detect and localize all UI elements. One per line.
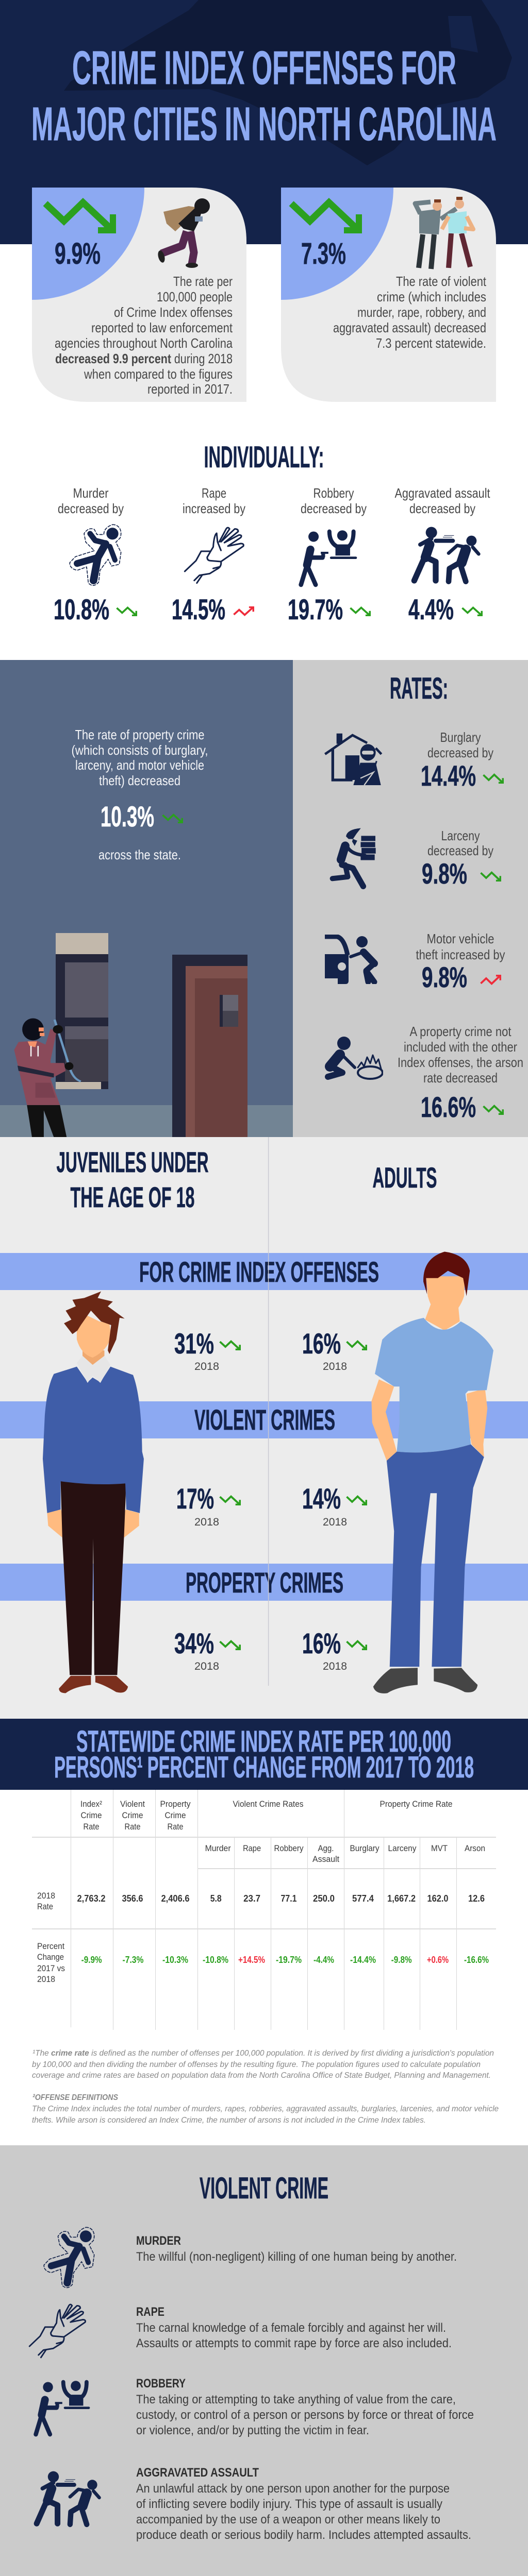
- table header row: Larceny: [388, 1843, 417, 1853]
- stat: adult property crimes: 16%: [302, 1627, 341, 1659]
- text: overall rate description: [55, 274, 233, 397]
- panel: violent crime card: [281, 188, 496, 402]
- stat: murder: [54, 485, 137, 625]
- table row: percent change: -14.4%: [350, 1955, 376, 1965]
- panel: overall crime index card: [32, 188, 246, 402]
- text: property crime rate: The rate of property crime: [75, 727, 204, 742]
- table header row: Property: [160, 1799, 191, 1809]
- table row: 2018 rate: Rate: [37, 1902, 53, 1911]
- table header row: Rate: [167, 1822, 184, 1832]
- heading: adults: ADULTS: [372, 1161, 437, 1194]
- stat: murder: 10.8%: [54, 593, 109, 625]
- title: [31, 42, 497, 150]
- table row: percent change: -10.8%: [203, 1955, 228, 1965]
- stat: robbery: Robbery: [314, 485, 354, 501]
- table row: 2018 rate: [37, 1891, 485, 1911]
- table header row: MVT: [431, 1843, 448, 1853]
- stat: juvenile crime index: 2018: [194, 1361, 219, 1372]
- stat: adult crime index: 16%: [302, 1327, 341, 1360]
- stat: adult violent crimes: 14%: [302, 1482, 341, 1515]
- table header row: Crime: [80, 1810, 102, 1820]
- table header row: Crime: [165, 1810, 186, 1820]
- text: property crime rate: theft) decreased: [99, 773, 180, 788]
- footnotes: thefts. While arson is considered an Index Crime, the number of arsons is not included in the Crime Index tables.: [32, 2116, 426, 2125]
- definition: aggravated assault: [37, 2466, 471, 2542]
- panel: property crime scene: [0, 660, 293, 1138]
- definition: aggravated assault: AGGRAVATED ASSAULT: [136, 2466, 259, 2480]
- definition: robbery: [36, 2377, 474, 2437]
- text: overall rate description: decreased 9.9 percent during 2018: [55, 351, 233, 366]
- icon: green down arrow: [291, 202, 362, 233]
- definition: rape: Assaults or attempts to commit rape by force are also included.: [136, 2336, 452, 2350]
- definition: aggravated assault: An unlawful attack by one person upon another for the purpose: [136, 2482, 450, 2496]
- stat: burglary rate: decreased by: [427, 745, 493, 760]
- stat: juvenile violent crimes: 17%: [176, 1482, 214, 1515]
- text: overall rate description: reported to law enforcement: [91, 320, 233, 335]
- text: overall rate description: agencies throughout North Carolina: [55, 335, 233, 351]
- table header row: Property Crime Rate: [380, 1799, 453, 1809]
- panel: violent crime definitions: [0, 2145, 528, 2576]
- text: property crime rate: (which consists of burglary,: [71, 742, 208, 758]
- stat: robbery: [288, 485, 371, 625]
- footnotes: by 100,000 and then dividing the number of offenses by the resulting figure. The population figures used to calculate population: [32, 2060, 481, 2069]
- table header row: Rape: [243, 1843, 261, 1853]
- stat: adult violent crimes: 2018: [323, 1516, 347, 1528]
- heading: individually: INDIVIDUALLY:: [204, 440, 324, 474]
- table row: 2018 rate: 23.7: [243, 1893, 260, 1904]
- stat: aggravated assault: Aggravated assault: [395, 485, 490, 501]
- header background with North Carolina map silhouette: [0, 0, 528, 244]
- stat: juvenile crime index: 31%: [174, 1327, 214, 1360]
- table row: percent change: Change: [37, 1952, 64, 1962]
- stat: burglary rate: [325, 730, 504, 792]
- stat: motor vehicle theft rate: [325, 931, 505, 993]
- table row: 2018 rate: 2,763.2: [77, 1893, 105, 1904]
- footnotes: ²OFFENSE DEFINITIONS: [32, 2093, 118, 2102]
- table row: percent change: Percent: [37, 1941, 64, 1951]
- table header row: Index²: [80, 1799, 102, 1809]
- table row: 2018 rate: 250.0: [313, 1893, 335, 1904]
- text: violent crime description: crime (which includes: [377, 289, 486, 304]
- definition: aggravated assault: of inflicting severe bodily injury. This type of assault is usually: [136, 2497, 442, 2511]
- definition: murder: [44, 2227, 457, 2287]
- heading: rates: RATES:: [390, 672, 448, 705]
- illustration: window: [56, 933, 108, 1089]
- illustration: thief with sack: [157, 198, 210, 268]
- text: property crime rate: across the state.: [98, 847, 181, 862]
- stat: robbery: decreased by: [301, 501, 367, 516]
- table row: 2018 rate: 577.4: [352, 1893, 374, 1904]
- band: violent crimes: VIOLENT CRIMES: [194, 1403, 335, 1436]
- stat: juvenile crime index: [174, 1327, 241, 1372]
- table: crime rates: [32, 1790, 496, 2030]
- stat: juvenile property crimes: [174, 1627, 241, 1672]
- band: for crime index offenses: [0, 1253, 528, 1290]
- stat: arson rate: A property crime not: [409, 1024, 512, 1039]
- table row: 2018 rate: 5.8: [210, 1893, 222, 1904]
- text: overall rate description: The rate per: [173, 274, 233, 289]
- table row: percent change: +14.5%: [238, 1955, 265, 1965]
- stat: juvenile violent crimes: 2018: [194, 1516, 219, 1528]
- stat: juvenile property crimes: 2018: [194, 1660, 219, 1672]
- table header row: Murder: [205, 1843, 231, 1853]
- stat: rape: [172, 485, 254, 625]
- definition: robbery: or violence, and/or by putting the victim in fear.: [136, 2424, 369, 2437]
- definition: robbery: custody, or control of a person or persons by force or threat of force: [136, 2408, 474, 2422]
- table row: percent change: [37, 1941, 489, 1984]
- stat: rape: increased by: [183, 501, 245, 516]
- table row: percent change: -4.4%: [314, 1955, 334, 1965]
- icon: green down arrow: [45, 202, 116, 233]
- text: violent crime description: murder, rape, robbery, and: [357, 304, 486, 320]
- section: juveniles and adults: [0, 1137, 528, 1719]
- table row: percent change: -9.8%: [391, 1955, 412, 1965]
- heading: statewide crime index rate: [0, 1719, 528, 1790]
- table header row: Arson: [465, 1843, 485, 1853]
- band: property crimes: PROPERTY CRIMES: [186, 1566, 343, 1599]
- table row: percent change: 2017 vs: [37, 1963, 65, 1973]
- table header row: Violent Crime Rates: [233, 1799, 303, 1809]
- band: property crimes: [0, 1564, 528, 1601]
- table header row: Rate: [125, 1822, 140, 1832]
- table header row: Assault: [312, 1854, 339, 1864]
- stat: motor vehicle theft rate: Motor vehicle: [427, 931, 494, 946]
- stat: burglary rate: Burglary: [440, 730, 481, 745]
- illustration: door: [172, 955, 248, 1137]
- stat: adult crime index: 2018: [323, 1361, 347, 1372]
- table row: 2018 rate: 2018: [37, 1891, 55, 1901]
- illustration: adult: [371, 1251, 493, 1693]
- table row: 2018 rate: 162.0: [427, 1893, 449, 1904]
- text: overall rate description: 100,000 people: [157, 289, 233, 304]
- stat: juvenile property crimes: 34%: [174, 1627, 214, 1659]
- stat: 7.3 percent: 7.3%: [301, 237, 346, 270]
- table header row: Rate: [84, 1822, 99, 1832]
- stat: adult violent crimes: [302, 1482, 367, 1528]
- text: property crime rate: 10.3%: [101, 800, 154, 833]
- stat: adult property crimes: 2018: [323, 1660, 347, 1672]
- text: violent crime description: The rate of violent: [396, 274, 487, 289]
- table row: percent change: -16.6%: [464, 1955, 489, 1965]
- definition: robbery: ROBBERY: [136, 2377, 186, 2391]
- table row: percent change: 2018: [37, 1974, 55, 1984]
- stat: larceny rate: [333, 828, 501, 890]
- stat: burglary rate: 14.4%: [421, 759, 476, 792]
- stat: arson rate: 16.6%: [421, 1091, 476, 1123]
- text: overall rate description: reported in 2017.: [147, 381, 233, 397]
- definition: aggravated assault: produce death or serious bodily harm. Includes attempted assaults.: [136, 2528, 471, 2542]
- section: violent crime definitions: [0, 2145, 528, 2576]
- illustration: burglar with crowbar: [14, 1019, 81, 1138]
- stat: adult property crimes: [302, 1627, 367, 1672]
- stat: murder: Murder: [73, 485, 109, 501]
- text: property crime rate: [71, 727, 208, 862]
- table header row: Robbery: [274, 1843, 304, 1853]
- heading: juveniles: THE AGE OF 18: [70, 1181, 195, 1213]
- stat: motor vehicle theft rate: 9.8%: [422, 961, 467, 993]
- stat: aggravated assault: [395, 485, 490, 625]
- definition: rape: RAPE: [136, 2305, 164, 2319]
- table header row: [80, 1799, 485, 1864]
- footnotes: [32, 2049, 499, 2125]
- stat: juvenile violent crimes: [176, 1482, 241, 1528]
- table row: 2018 rate: 77.1: [280, 1893, 297, 1904]
- definition: murder: The willful (non-negligent) killing of one human being by another.: [136, 2250, 457, 2264]
- table row: percent change: -10.3%: [162, 1955, 188, 1965]
- table header row: Crime: [122, 1810, 143, 1820]
- table row: 2018 rate: 1,667.2: [387, 1893, 416, 1904]
- panel: juveniles and adults comparison: [0, 1137, 528, 1719]
- table row: 2018 rate: 2,406.6: [161, 1893, 190, 1904]
- definition: rape: [29, 2304, 452, 2358]
- stat: larceny rate: Larceny: [441, 828, 480, 843]
- stat: aggravated assault: 4.4%: [408, 593, 454, 625]
- footnotes: coverage and crime rates are based on population data from the North Carolina Office of State Budget, Planning and Management.: [32, 2071, 491, 2080]
- text: violent crime description: 7.3 percent statewide.: [376, 335, 486, 351]
- definition: robbery: The taking or attempting to take anything of value from the care,: [136, 2393, 456, 2406]
- table row: 2018 rate: 356.6: [122, 1893, 143, 1904]
- table header row: Burglary: [350, 1843, 380, 1853]
- table row: 2018 rate: 12.6: [468, 1893, 485, 1904]
- stat: rape: 14.5%: [172, 593, 225, 625]
- definition: rape: The carnal knowledge of a female forcibly and against her will.: [136, 2321, 446, 2335]
- stat: robbery: 19.7%: [288, 593, 343, 625]
- stat: larceny rate: decreased by: [427, 843, 493, 858]
- illustration: juvenile: [43, 1292, 144, 1693]
- stat: arson rate: [328, 1024, 523, 1123]
- heading: juveniles: JUVENILES UNDER: [57, 1146, 208, 1178]
- table row: percent change: -9.9%: [81, 1955, 102, 1965]
- text: overall rate description: of Crime Index offenses: [114, 304, 233, 320]
- text: violent crime description: aggravated assault) decreased: [333, 320, 486, 335]
- stat: 9.9 percent: 9.9%: [55, 237, 101, 270]
- table header row: Agg.: [318, 1843, 334, 1853]
- stat: murder: decreased by: [58, 501, 124, 516]
- stat: rape: Rape: [202, 485, 226, 501]
- stat: motor vehicle theft rate: theft increased by: [416, 947, 505, 962]
- table row: percent change: -19.7%: [276, 1955, 302, 1965]
- table row: percent change: +0.6%: [427, 1955, 449, 1965]
- panel: rates: [293, 660, 528, 1137]
- stat: adult crime index: [302, 1327, 367, 1372]
- stat: larceny rate: 9.8%: [422, 857, 467, 890]
- illustration: two men fighting: [415, 197, 473, 269]
- heading: violent crime: VIOLENT CRIME: [200, 2172, 328, 2205]
- text: violent crime description: [333, 274, 487, 351]
- definition: murder: MURDER: [136, 2234, 181, 2248]
- stat: arson rate: rate decreased: [423, 1070, 498, 1086]
- stat: aggravated assault: decreased by: [409, 501, 475, 516]
- table header row: Violent: [120, 1799, 145, 1809]
- heading: juveniles: [57, 1146, 208, 1213]
- footnotes: The Crime Index includes the total number of murders, rapes, robberies, aggravated assaults, burglaries, larcenies, and motor vehicle: [32, 2105, 499, 2113]
- text: property crime rate: larceny, and motor vehicle: [75, 757, 204, 773]
- table row: percent change: -7.3%: [123, 1955, 143, 1965]
- band: violent crimes: [0, 1401, 528, 1438]
- section: property crime and rates: [0, 660, 528, 1137]
- definition: aggravated assault: accompanied by the use of a weapon or other means likely to: [136, 2513, 440, 2527]
- footnotes: ¹The crime rate is defined as the number of offenses per 100,000 population. It is derived by first dividing a jurisdiction's population: [32, 2049, 494, 2058]
- section: statewide table: [0, 1719, 528, 2125]
- text: overall rate description: when compared to the figures: [84, 366, 233, 382]
